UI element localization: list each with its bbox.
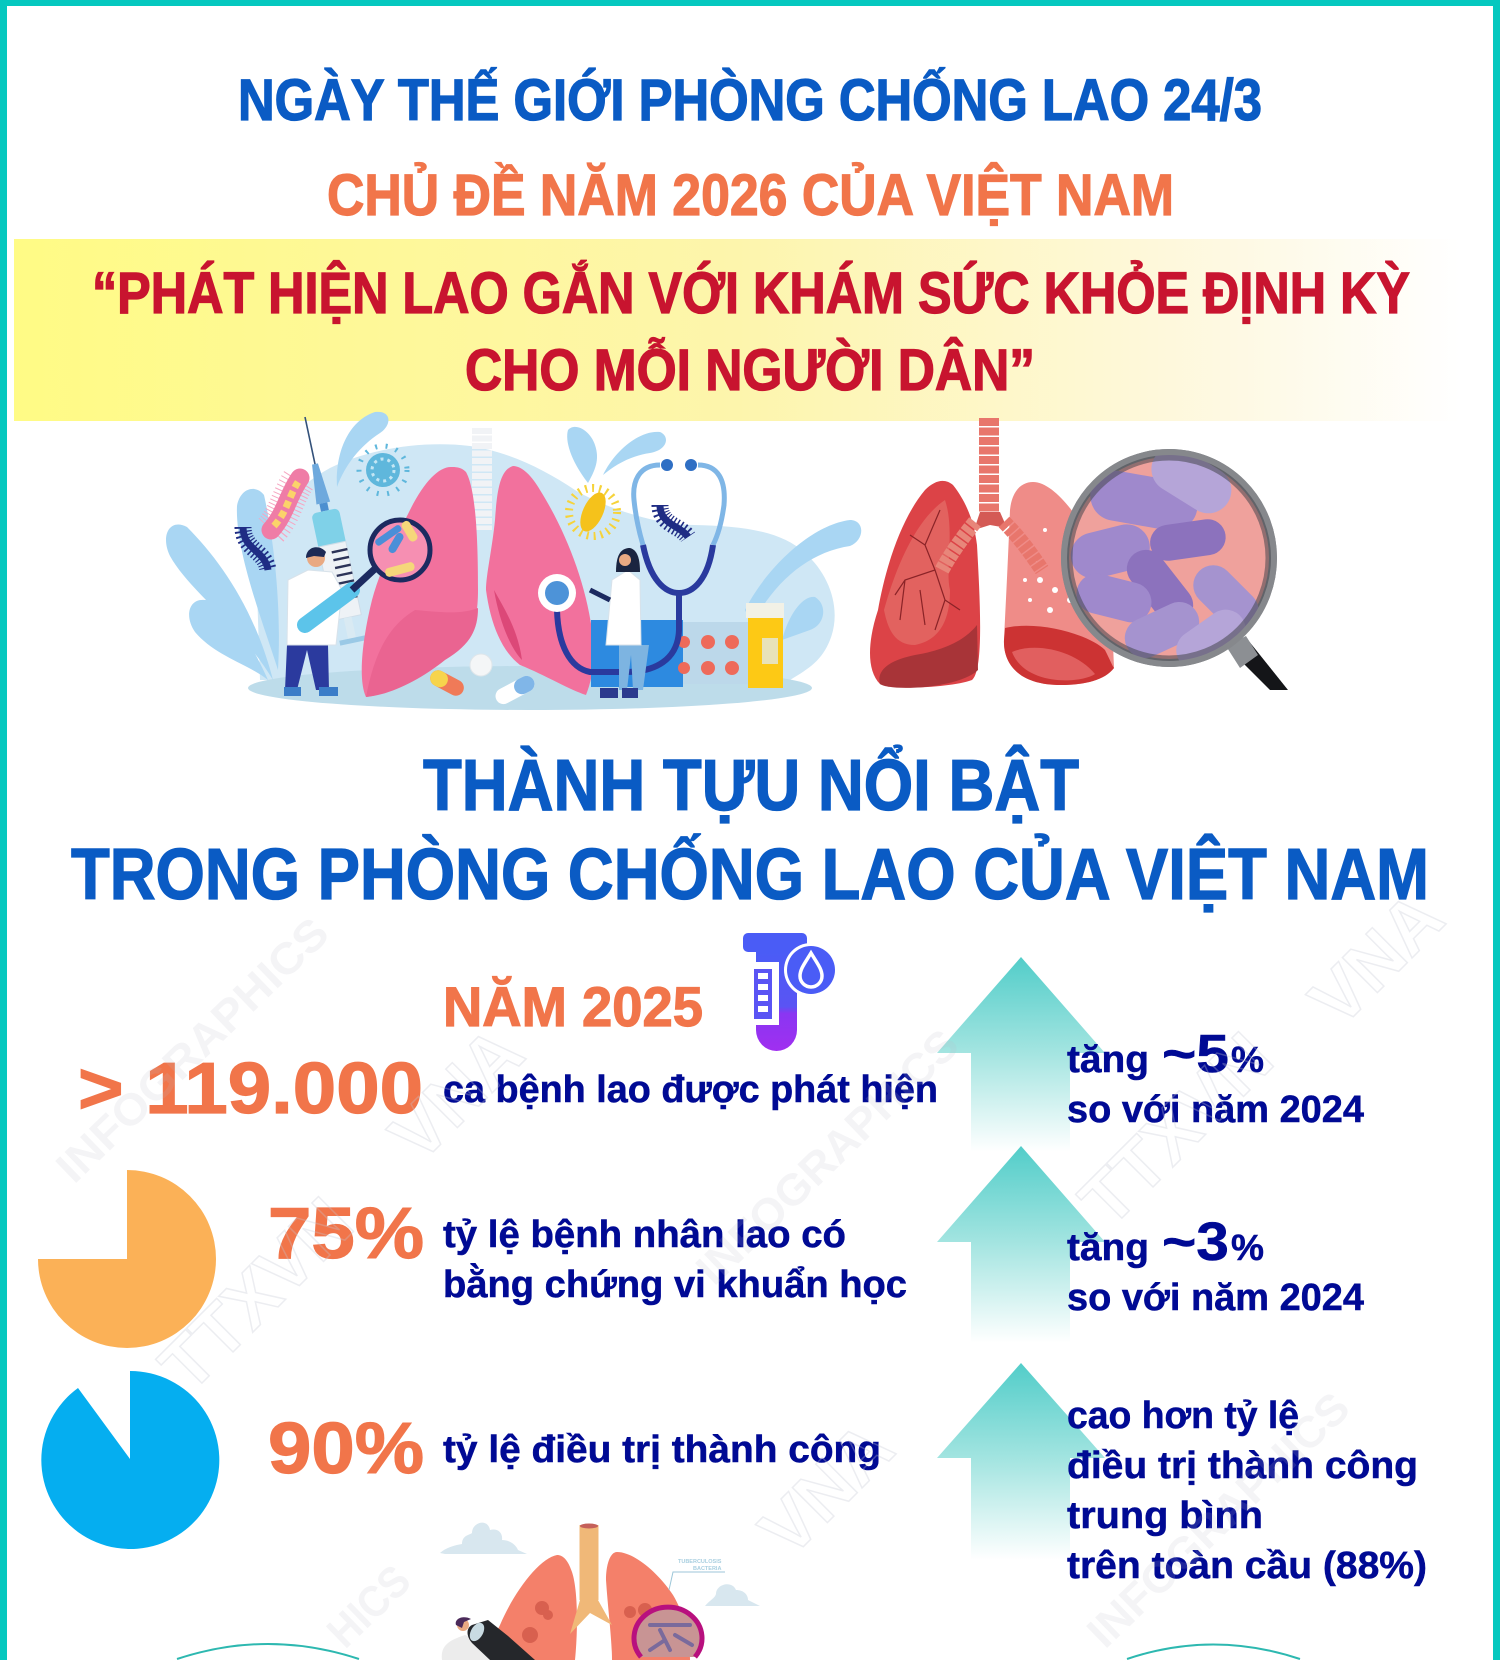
number: > 119.000 [78,1049,423,1129]
callout: up 5 percent: tăng [1067,1039,1149,1081]
watermark: INFOGRAPHICS [47,908,338,1192]
description: tỷ lệ điều trị thành công [443,1429,881,1471]
bacteria and virus [243,446,688,570]
right lung [1004,482,1114,685]
pills [427,654,537,707]
stat: 75 percent [268,1194,907,1306]
callout: above global average: trung bình [1067,1495,1263,1537]
magnifier handle [1230,640,1288,690]
description line 1: tỷ lệ bệnh nhân lao có [443,1214,846,1256]
arrow 2 [937,1146,1105,1343]
description line 2: bằng chứng vi khuẩn học [443,1262,907,1306]
icon: test tube with drop [743,933,838,1051]
title: world TB day: NGÀY THẾ GIỚI PHÒNG CHỐNG LAO 24/3 [238,68,1262,133]
stat: 90 percent [268,1409,881,1489]
bacteria magnifier [634,1607,702,1657]
illustration: doctors examining lungs [166,412,861,710]
arrow 1 [937,957,1105,1152]
bottom circle arc right [1127,1644,1300,1659]
scientist with telescope [442,1635,510,1660]
theme banner [14,239,1460,421]
watermark: INFOGRAPHICS [1078,1383,1359,1657]
arrow 3 [937,1363,1105,1560]
subtitle: 2026 theme: CHỦ ĐỀ NĂM 2026 CỦA VIỆT NAM [327,163,1174,228]
label: tuberculosis bacteria: TUBERCULOSIS [678,1559,722,1565]
description: ca bệnh lao được phát hiện [443,1069,938,1111]
heading: achievements line 1: THÀNH TỰU NỔI BẬT [423,745,1079,826]
callout: above global average: điều trị thành công [1067,1445,1418,1487]
illustration: diseased lungs under magnifier [870,418,1288,690]
stat: cases detected [78,1049,938,1129]
spine [472,428,492,530]
stethoscope [538,459,724,672]
watermark: VNA [375,1012,539,1176]
bottom circle arc left [177,1644,359,1659]
callout: up 3 percent: % [1231,1227,1264,1268]
callout: up 3 percent: tăng [1067,1227,1149,1269]
theme line 2: CHO MỖI NGƯỜI DÂN” [465,338,1035,403]
callout: up 3 percent: so với năm 2024 [1067,1277,1364,1319]
label: tuberculosis bacteria: BACTERIA [693,1566,721,1572]
callout: up 3 percent [1067,1212,1364,1319]
watermark [47,877,1459,1657]
trachea [979,418,999,512]
watermark: VNA [745,1407,909,1571]
left red lung [870,481,980,687]
callout: up 5 percent: so với năm 2024 [1067,1089,1364,1131]
doctor: woman [590,548,649,698]
callout: above global average [1067,1395,1427,1587]
trachea and bronchi [580,1525,598,1600]
watermark: INFOGRAPHICS [687,1020,968,1294]
callout: above global average: cao hơn tỷ lệ [1067,1395,1299,1437]
illustration: lungs with telescope [440,1523,760,1660]
syringe [291,414,367,646]
watermark: TTXVN [145,1183,368,1406]
salmon lungs [482,1555,577,1660]
callout: up 5 percent [1067,1024,1364,1131]
callout: up 3 percent: ~3 [1162,1212,1229,1272]
percent: 75% [268,1194,424,1274]
magnifying glass [1065,453,1273,663]
magnifier on lung [305,519,430,625]
pie: 90 percent [41,1371,219,1549]
doctor: man with magnifier [284,547,342,696]
pie: 75 percent [38,1170,216,1348]
clouds [440,1523,760,1606]
watermark: TTXVN [1065,1018,1288,1241]
label: tuberculosis bacteria [669,1559,725,1590]
medicine blister and bottle [591,603,784,688]
callout: up 5 percent: ~5 [1162,1024,1229,1084]
watermark: VNA [1295,877,1459,1041]
pink lungs [362,466,594,697]
year label: NĂM 2025 [443,975,703,1038]
watermark: HICS [318,1556,420,1657]
callout: up 5 percent: % [1231,1039,1264,1080]
percent: 90% [268,1409,424,1489]
callout: above global average: trên toàn cầu (88%) [1067,1545,1427,1587]
